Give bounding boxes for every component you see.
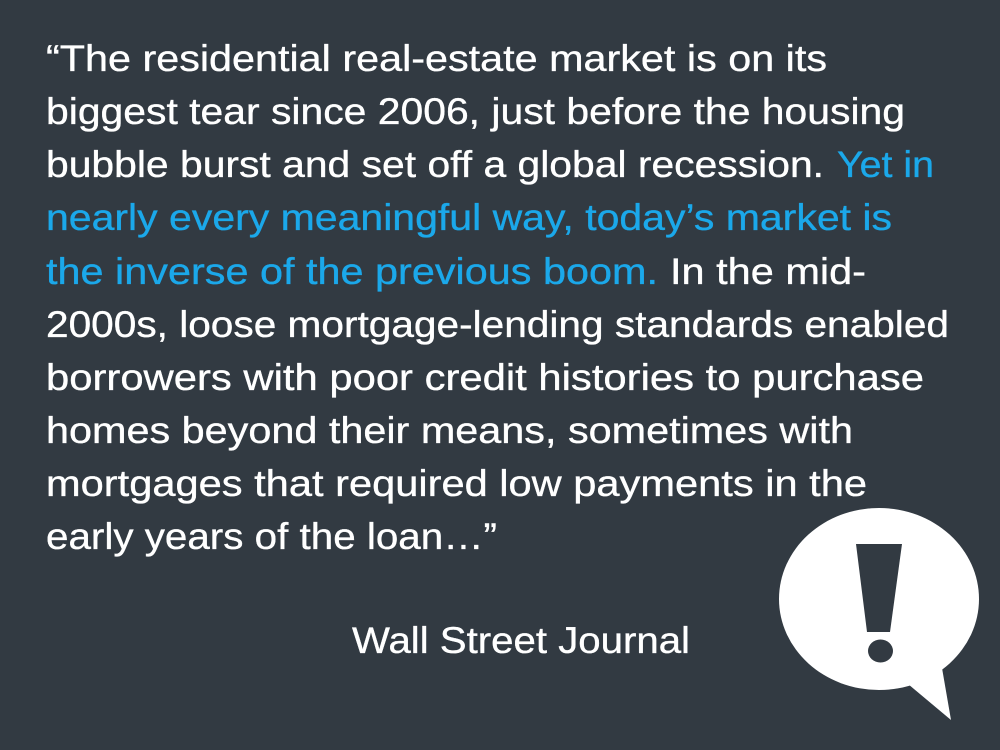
quote text block: borrowers with poor credit histories to purchase: [46, 357, 924, 398]
quote text block: mortgages that required low payments in the: [46, 463, 867, 504]
quote text block: Yet in: [837, 144, 934, 185]
quote text block: 2000s, loose mortgage-lending standards enabled: [46, 304, 949, 345]
quote text block: bubble burst and set off a global recession.: [46, 144, 824, 185]
quote text block: nearly every meaningful way, today’s market is: [46, 197, 892, 238]
quote text block: early years of the loan…”: [46, 516, 497, 557]
quote text block: the inverse of the previous boom.: [46, 251, 658, 292]
quote text block: homes beyond their means, sometimes with: [46, 410, 853, 451]
quote text block: “The residential real-estate market is on its: [46, 38, 827, 79]
quote text block: In the mid-: [670, 251, 866, 292]
quote text block: biggest tear since 2006, just before the housing: [46, 91, 905, 132]
quote text block: [46, 38, 949, 557]
attribution: Wall Street Journal: [352, 620, 690, 661]
icon: speech bubble with exclamation mark: [779, 508, 979, 720]
